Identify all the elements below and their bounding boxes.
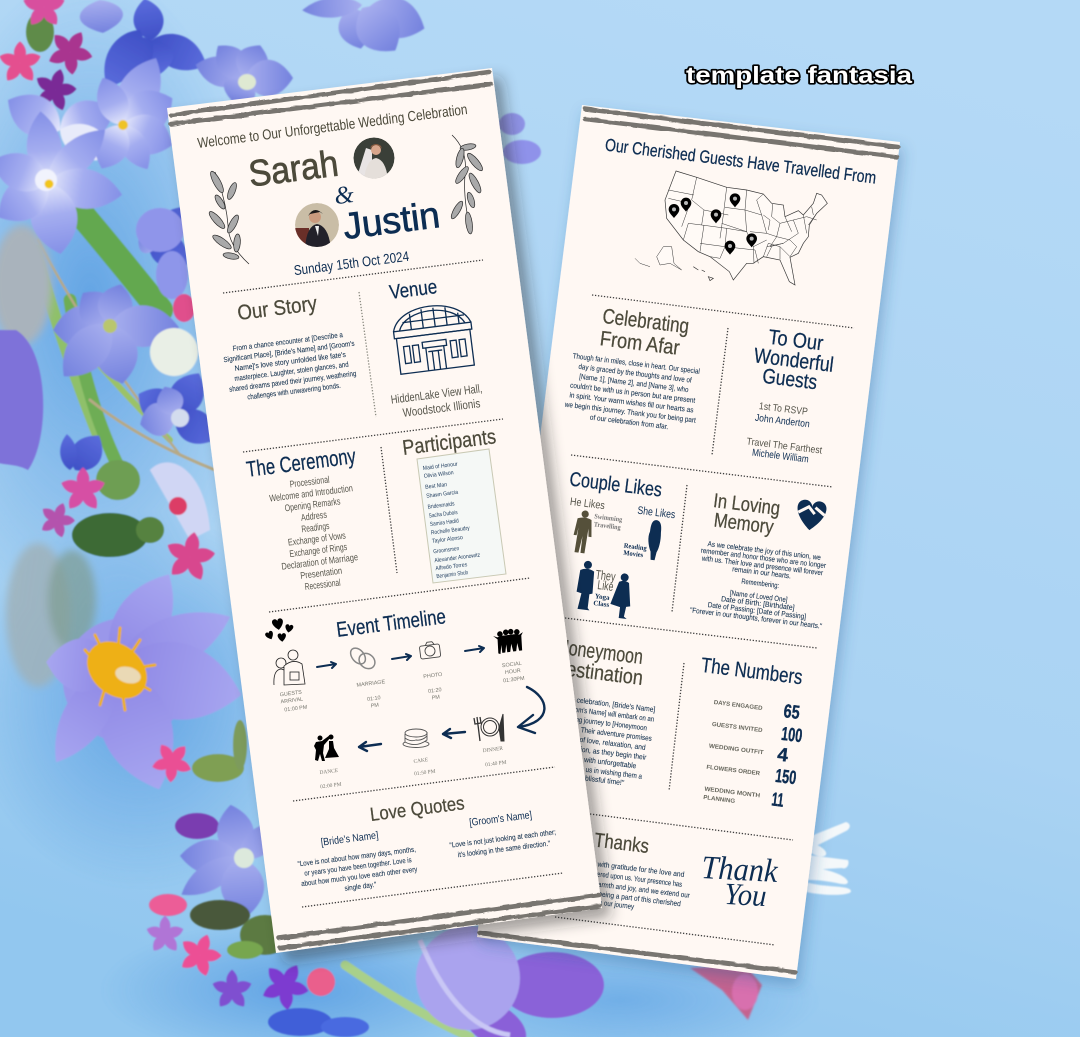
couple likes panel xyxy=(569,496,676,619)
heading: to our wonderful guests: Guests xyxy=(761,365,818,394)
icon: camera xyxy=(419,641,441,659)
text: celebrating from afar: couldn't be with us in person but are present xyxy=(570,381,696,405)
subtitle: Welcome to Our Unforgettable Wedding Celebration xyxy=(197,102,468,152)
list: ceremony order: Processional xyxy=(289,475,330,490)
icon: heart with hands xyxy=(795,499,827,532)
heading: participants: Participants xyxy=(401,425,497,460)
text: honeymoon: exciting journey to [Honeymoon xyxy=(561,713,648,733)
labels: timeline first row: PHOTO xyxy=(423,672,443,680)
couple likes panel: Yoga xyxy=(594,592,611,602)
venue address: HiddenLake View Hall, xyxy=(390,381,483,407)
text: in loving memory: with us. Their love and presence will forever xyxy=(701,553,824,577)
numbers values: 150 xyxy=(774,766,797,789)
text: in loving memory: As we celebrate the joy of this union, we xyxy=(707,539,821,562)
text: celebrating from afar: [Name 1], [Name 2], and [Name 3], who xyxy=(579,372,689,394)
couple likes panel: Reading xyxy=(623,542,648,552)
labels: timeline second row: 01:40 PM xyxy=(485,760,507,768)
numbers labels: WEDDING OUTFIT xyxy=(708,744,764,756)
text: in loving memory xyxy=(689,538,831,631)
text: honeymoon: Destination]. Their adventure promises xyxy=(544,721,653,743)
feathery grey bud xyxy=(0,225,96,687)
venue address xyxy=(390,381,483,420)
list: ceremony order: Exchange of Rings xyxy=(289,542,348,560)
wedding date: Sunday 15th Oct 2024 xyxy=(293,248,410,278)
numbers labels xyxy=(703,700,764,805)
text: honeymoon: exploration, as they begin their xyxy=(557,742,647,762)
list: ceremony order: Recessional xyxy=(304,577,341,593)
right card bottom band xyxy=(480,933,795,972)
text: thanks xyxy=(541,853,693,918)
icon: social group xyxy=(493,627,525,655)
lower pink buds and flower xyxy=(143,720,369,1037)
icon: cake xyxy=(403,729,429,748)
heading: couple likes: Couple Likes xyxy=(568,468,663,502)
numbers labels: FLOWERS ORDER xyxy=(706,765,761,777)
heading: to our wonderful guests xyxy=(753,326,835,394)
text: our story: Significant Place], [Bride's Name] and [Groom's xyxy=(223,339,355,364)
text: thanks: blessings showered upon us. Your presence has xyxy=(557,865,683,889)
heading: in loving memory xyxy=(712,490,781,539)
green stems and blades xyxy=(35,210,470,1037)
labels: timeline first row: ARRIVAL xyxy=(280,697,303,705)
labels: timeline first row: PM xyxy=(431,694,441,701)
text: celebrating from afar xyxy=(562,351,702,434)
heading: the ceremony: The Ceremony xyxy=(245,443,357,482)
numbers values xyxy=(770,701,803,812)
periwinkle flowers beside card xyxy=(0,198,225,540)
darker blue surface behind flowers xyxy=(0,0,820,1037)
heading: cherished guests: Our Cherished Guests Have Travelled From xyxy=(604,134,877,188)
icon: dancing couple xyxy=(314,734,339,761)
quote: bride: [Bride's Name] xyxy=(320,829,379,849)
guest awards: Michele William xyxy=(751,448,809,465)
arrow xyxy=(465,646,484,652)
wreath: left sprig xyxy=(207,170,249,264)
text: thanks: filled our day with warmth and joy, and we extend our xyxy=(543,873,691,900)
floral decoration: left and bottom xyxy=(0,0,851,1037)
ampersand: & xyxy=(333,181,356,210)
heading: venue: Venue xyxy=(388,276,438,304)
list: ceremony order: Welcome and Introduction xyxy=(269,483,353,505)
text: our story: masterpiece. Laughter, stolen glances, and xyxy=(234,360,349,383)
labels: timeline second row xyxy=(319,746,507,790)
guest awards xyxy=(746,401,823,465)
labels: timeline first row xyxy=(280,661,525,713)
couple likes panel: Movies xyxy=(623,549,644,559)
couple likes panel: Travelling xyxy=(593,520,622,532)
numbers values: 11 xyxy=(770,789,785,812)
heading: in loving memory: Memory xyxy=(713,509,775,539)
labels: timeline second row: 02:00 PM xyxy=(320,782,342,790)
panel: participants list: Alfredo Torres xyxy=(435,562,468,572)
heading: to our wonderful guests: To Our xyxy=(767,326,824,355)
icon: venue building xyxy=(391,301,476,375)
text: honeymoon xyxy=(538,692,656,790)
guest awards: John Anderton xyxy=(754,413,810,430)
heading: many thanks: Many Thanks xyxy=(548,824,650,858)
labels: timeline second row: CAKE xyxy=(413,757,429,765)
right card xyxy=(477,105,900,979)
photo: bride xyxy=(354,138,394,180)
magenta and green cluster mid-left xyxy=(33,460,220,586)
panel: participants list xyxy=(417,449,506,583)
left card bottom bands xyxy=(279,895,600,948)
couple likes panel: They xyxy=(595,567,617,584)
panel: participants list: Alexander Aronowitz xyxy=(434,553,481,564)
heading: honeymoon destination: Honeymoon xyxy=(556,636,644,669)
panel: participants list: Bridesmaids xyxy=(427,501,455,511)
labels: timeline first row: HOUR xyxy=(505,668,521,676)
guest awards: Travel The Farthest xyxy=(746,436,823,457)
text: honeymoon: After the celebration, [Bride's Name] xyxy=(550,692,656,714)
list: ceremony order: Declaration of Marriage xyxy=(281,552,359,573)
labels: timeline first row: MARRIAGE xyxy=(356,679,386,689)
heading: celebrating from afar xyxy=(599,305,690,360)
wreath: right sprig xyxy=(449,135,485,234)
labels: timeline first row: GUESTS xyxy=(280,690,303,698)
text: honeymoon: a blend of love, relaxation, and xyxy=(556,732,646,752)
script: thank you xyxy=(701,850,780,913)
quote: groom: "Love is not just looking at each other; xyxy=(449,827,556,850)
panel: participants list: Taylor Alonso xyxy=(432,535,463,545)
text: our story: From a chance encounter at [Describe a xyxy=(232,330,344,353)
quote: bride: "Love is not about how many days, months, xyxy=(297,845,416,868)
list: ceremony order: Readings xyxy=(301,521,330,535)
text: honeymoon: and [Groom's Name] will embark on an xyxy=(551,702,655,724)
quote: bride: single day." xyxy=(344,880,377,893)
text: celebrating from afar: day is graced by the thoughts and love of xyxy=(578,362,693,385)
pink lungwort blossoms top xyxy=(0,0,102,116)
quote: bride: or years you have been together. Love is xyxy=(304,855,412,878)
text: our story: challenges with unwavering bonds. xyxy=(247,381,341,401)
labels: timeline second row: 01:50 PM xyxy=(414,769,436,777)
text: our story: shared dreams paved their journey, weathering xyxy=(229,369,357,394)
numbers values: 100 xyxy=(780,724,803,747)
text: honeymoon: Join us in wishing them a xyxy=(572,763,643,781)
heading: in loving memory: In Loving xyxy=(712,490,781,520)
labels: timeline first row: 01:20 xyxy=(428,687,442,695)
labels: timeline second row: DINNER xyxy=(482,746,504,754)
panel: participants list: Rochelle Beaudry xyxy=(431,526,470,536)
couple likes panel: Class xyxy=(593,599,610,609)
text: celebrating from afar: in spirit. Your warm wishes fill our hearts as xyxy=(569,390,694,415)
pink bud right bottom xyxy=(690,965,762,1020)
heading: honeymoon destination xyxy=(552,636,644,690)
labels: timeline first row: SOCIAL xyxy=(502,661,522,669)
name: Sarah: Sarah xyxy=(246,143,341,195)
silhouette: he likes xyxy=(572,509,595,554)
labels: timeline first row: PM xyxy=(370,702,380,709)
text: thanks: Filled with gratitude for the love and xyxy=(580,857,685,879)
arrow xyxy=(392,654,411,660)
top flowers xyxy=(78,0,541,164)
heading: the numbers: The Numbers xyxy=(700,654,804,689)
numbers values: 65 xyxy=(782,701,801,724)
arrow xyxy=(359,742,381,751)
left card xyxy=(167,68,602,953)
text: our story xyxy=(222,329,360,404)
quote: groom xyxy=(449,809,558,860)
couple likes panel: He Likes xyxy=(569,496,606,512)
list: ceremony order xyxy=(267,472,365,596)
name: Justin: Justin xyxy=(341,194,442,247)
blue star flowers xyxy=(0,49,182,258)
couple likes panel: She Likes xyxy=(637,505,676,521)
couple likes panel: Like xyxy=(597,577,614,594)
bottom purple flower xyxy=(416,926,604,1037)
text: in loving memory: Date of Passing: [Date of Passing] xyxy=(707,600,807,621)
quote: bride: about how much you love each other every xyxy=(301,865,418,888)
large pasque flower xyxy=(38,561,249,801)
silhouette: they like couple xyxy=(574,560,635,619)
heading: honeymoon destination: Destination xyxy=(552,656,644,690)
text: in loving memory: Date of Birth: [Birthdate] xyxy=(721,594,795,612)
numbers labels: PLANNING xyxy=(703,795,736,805)
numbers labels: WEDDING MONTH xyxy=(704,787,760,799)
labels: timeline first row: 01:30PM xyxy=(503,676,525,684)
icon: dinner xyxy=(474,714,504,741)
text: honeymoon: joyful and blissful time!" xyxy=(553,770,625,787)
panel: participants list: Benjamin Shuh xyxy=(436,570,469,580)
text: in loving memory: remain in our hearts. xyxy=(732,564,791,580)
photo: groom xyxy=(295,203,339,250)
labels: timeline first row: 01:00 PM xyxy=(284,705,308,713)
panel: participants list: Sacha Dubois xyxy=(429,510,458,520)
curved arrow xyxy=(518,687,544,733)
icon: wedding rings xyxy=(348,645,378,672)
list: ceremony order: Exchange of Vows xyxy=(287,530,346,549)
panel: participants list: Shawn Garcia xyxy=(426,490,459,500)
US map with pins xyxy=(635,171,827,285)
silhouette: she likes xyxy=(646,519,663,561)
text: in loving memory: Remembering: xyxy=(741,576,780,590)
text: our story: Name]'s love story unfolded like fate's xyxy=(234,350,347,373)
text: celebrating from afar: of our celebration from afar. xyxy=(589,413,669,431)
panel: participants list: Groomsmen xyxy=(433,546,460,555)
white flower right xyxy=(804,822,851,895)
couple likes panel: Swimming xyxy=(594,512,623,524)
icon: guests arrival xyxy=(274,650,305,685)
text: in loving memory: [Name of Loved One] xyxy=(729,588,788,604)
heading: celebrating from afar: Celebrating xyxy=(601,305,690,338)
guest awards: 1st To RSVP xyxy=(758,401,809,418)
icon: hearts xyxy=(265,618,294,642)
watermark: template fantasia xyxy=(686,62,912,88)
list: ceremony order: Address xyxy=(300,510,328,524)
left card top bands xyxy=(171,72,491,124)
arrow xyxy=(317,662,336,668)
left card sheet xyxy=(167,68,602,953)
right card sheet xyxy=(477,105,900,979)
script: thank you: You xyxy=(724,876,767,913)
numbers labels: GUESTS INVITED xyxy=(711,722,763,734)
panel: participants list: Samira Hadid xyxy=(430,518,459,528)
text: honeymoon: new life with unforgettable xyxy=(559,752,637,770)
labels: timeline second row: DANCE xyxy=(319,768,339,776)
heading: event timeline: Event Timeline xyxy=(335,605,447,642)
text: in loving memory: remember and honor those who are no longer xyxy=(700,546,827,570)
arrow xyxy=(443,729,465,738)
list: ceremony order: Opening Remarks xyxy=(284,496,341,514)
text: celebrating from afar: Though far in miles, close in heart. Our special xyxy=(572,351,701,376)
text: celebrating from afar: we begin this journey. Thank you for being part xyxy=(563,400,696,425)
quote: bride xyxy=(297,829,420,898)
numbers values: 4 xyxy=(776,744,790,767)
heading: celebrating from afar: From Afar xyxy=(599,327,681,360)
quote: groom: it's looking in the same direction." xyxy=(457,839,551,859)
text: in loving memory: "Forever in our thoughts, forever in our hearts." xyxy=(689,605,823,631)
labels: timeline first row: 01:10 xyxy=(367,695,381,703)
list: ceremony order: Presentation xyxy=(300,566,343,582)
script: thank you: Thank xyxy=(701,850,780,890)
panel: participants list: Olivia Wilson xyxy=(424,470,454,480)
heading: our story: Our Story xyxy=(236,292,319,325)
heading: love quotes: Love Quotes xyxy=(369,793,466,826)
text: thanks: moment in our journey xyxy=(574,895,635,911)
numbers labels: DAYS ENGAGED xyxy=(713,700,763,712)
quote: groom: [Groom's Name] xyxy=(469,809,533,829)
heading: to our wonderful guests: Wonderful xyxy=(753,344,835,377)
text: thanks: thanks for being a part of this cherished xyxy=(568,886,681,908)
right card top bands xyxy=(585,109,898,157)
panel: participants list: Best Man xyxy=(425,482,447,491)
panel: participants list: Maid of Honour xyxy=(422,462,458,472)
venue address: Woodstock Illionis xyxy=(402,396,481,420)
